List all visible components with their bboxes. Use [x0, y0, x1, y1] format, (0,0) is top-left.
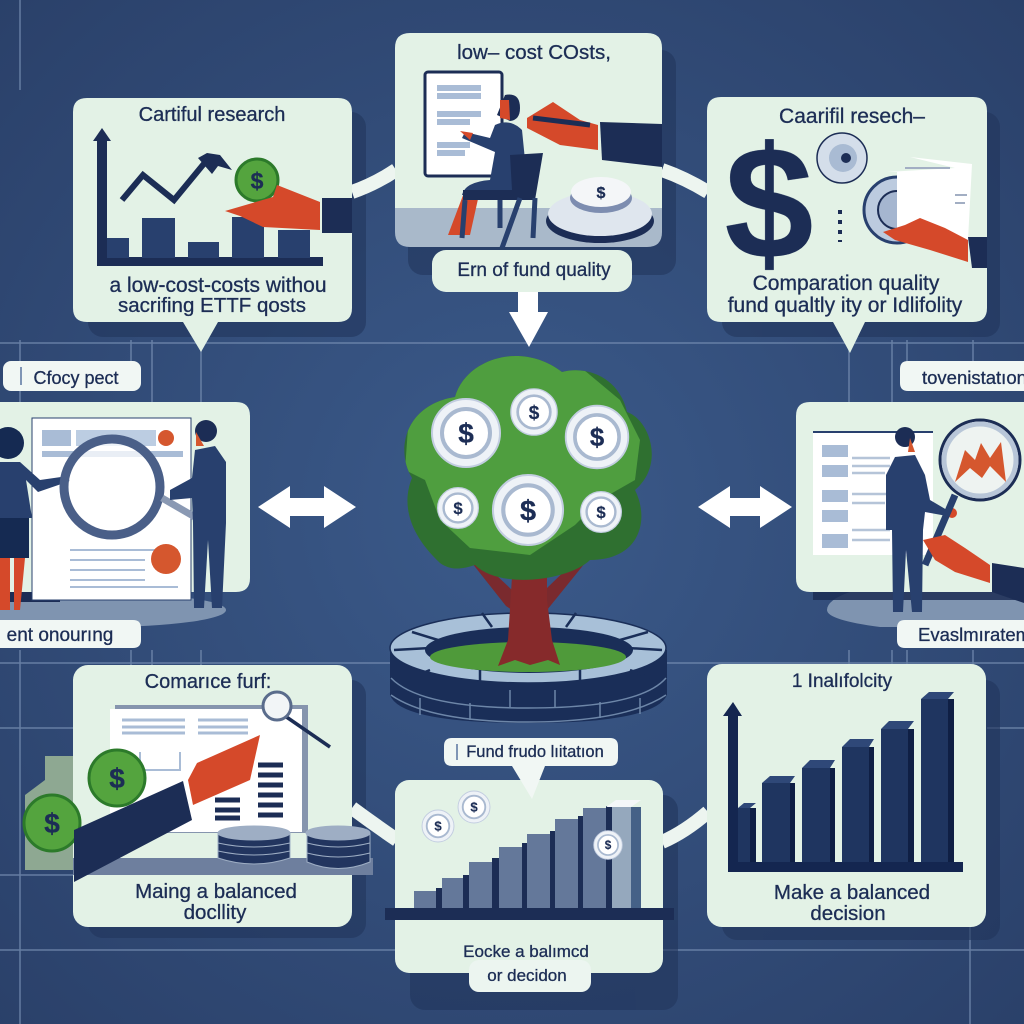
icon: document — [110, 705, 308, 833]
icon: green coins: $ — [109, 763, 125, 794]
panel: careful research dollar — [707, 97, 987, 353]
icon: reaching hand with pen — [527, 102, 662, 167]
arrow: right double — [698, 486, 792, 528]
label: or decision: or decidon — [487, 966, 567, 985]
panel: low-cost costs — [395, 33, 662, 248]
icon: green coins: $ — [44, 808, 60, 839]
icon: report sheet — [32, 418, 191, 600]
label: policy — [3, 361, 141, 391]
panel: evaluating with magnifier — [796, 402, 1024, 627]
well — [390, 613, 667, 723]
panel: rising chart — [385, 780, 674, 973]
icon: man figure — [170, 420, 226, 608]
icon: coin button: $ — [597, 185, 606, 202]
panel: careful research dollar: Caarifil resech– — [779, 105, 925, 128]
panel: careful research chart: a low-cost-costs withou — [109, 274, 327, 297]
icon: magnifier — [925, 420, 1020, 565]
panel: compare funds: docllity — [184, 901, 247, 924]
bar chart — [723, 692, 963, 872]
icon: coin stacks — [218, 826, 370, 868]
icon: small coins — [422, 791, 490, 842]
label: fund quality — [432, 250, 632, 292]
icon: document and coin with hand — [864, 157, 987, 268]
panel: careful research dollar: fund qualtly ity or Idlifolity — [728, 294, 963, 317]
icon: magnifier — [263, 692, 330, 747]
panel: compare funds — [24, 665, 373, 927]
coins — [432, 399, 500, 467]
label: investigation — [900, 361, 1024, 391]
panel: careful research chart — [73, 98, 352, 352]
panel: careful research chart: sacrifing ETTF qosts — [118, 294, 306, 317]
icon: hand — [923, 535, 1024, 603]
icon: hand holding green coin: $ — [251, 168, 264, 194]
panel: growth bars: Make a balanced — [774, 881, 930, 904]
panel: careful research chart: Cartiful research — [139, 104, 285, 126]
arrow: left double — [258, 486, 356, 528]
icon: woman figure — [0, 427, 70, 610]
panel: compare funds: Maing a balanced — [135, 880, 297, 903]
label: onboarding: ent onourıng — [7, 625, 113, 646]
panel: growth bars: decision — [810, 902, 886, 925]
icon: small coin — [817, 133, 867, 183]
panel: growth bars — [707, 664, 986, 927]
panel: low-cost costs: low– cost COsts, — [457, 41, 611, 64]
panel: compare funds: Comarıce furf: — [145, 671, 271, 693]
icon: seated person on chair — [448, 95, 543, 248]
panel: growth bars: 1 Inalıfolcity — [792, 671, 893, 692]
icon: hand holding green coin — [225, 159, 352, 233]
icon: report — [813, 431, 933, 555]
icon: green coins — [24, 750, 145, 851]
icon: coin button — [546, 177, 654, 243]
label: onboarding — [0, 620, 141, 648]
bar chart — [385, 800, 674, 920]
connector curves between panels — [352, 170, 708, 842]
icon: large dollar sign: $ — [725, 113, 813, 292]
label: evaluation — [897, 620, 1024, 648]
icon: document board — [425, 72, 502, 176]
icon: large magnifier — [64, 439, 200, 535]
icon: reaching arm — [74, 735, 260, 882]
canopy — [404, 350, 652, 580]
label: fund quality: Ern of fund quality — [457, 260, 611, 281]
arrow: down to tree — [509, 292, 548, 347]
panel: careful research dollar: Comparation quality — [753, 272, 940, 295]
label: fund liquidation: Fund frudo lıitatıon — [466, 743, 604, 761]
panel: analysts with magnifier — [0, 402, 250, 627]
label: investigation: tovenistatıon — [922, 367, 1024, 388]
trunk — [472, 558, 585, 666]
label: or decision — [469, 960, 591, 992]
icon: money tree — [390, 350, 667, 723]
label: policy: Cfocy pect — [33, 368, 119, 388]
panel: rising chart: Eocke a balımcd — [463, 942, 589, 961]
icon: glass jar — [25, 756, 73, 870]
icon: bar chart with arrow — [93, 128, 323, 266]
icon: man — [886, 427, 957, 612]
label: fund liquidation — [444, 738, 618, 799]
